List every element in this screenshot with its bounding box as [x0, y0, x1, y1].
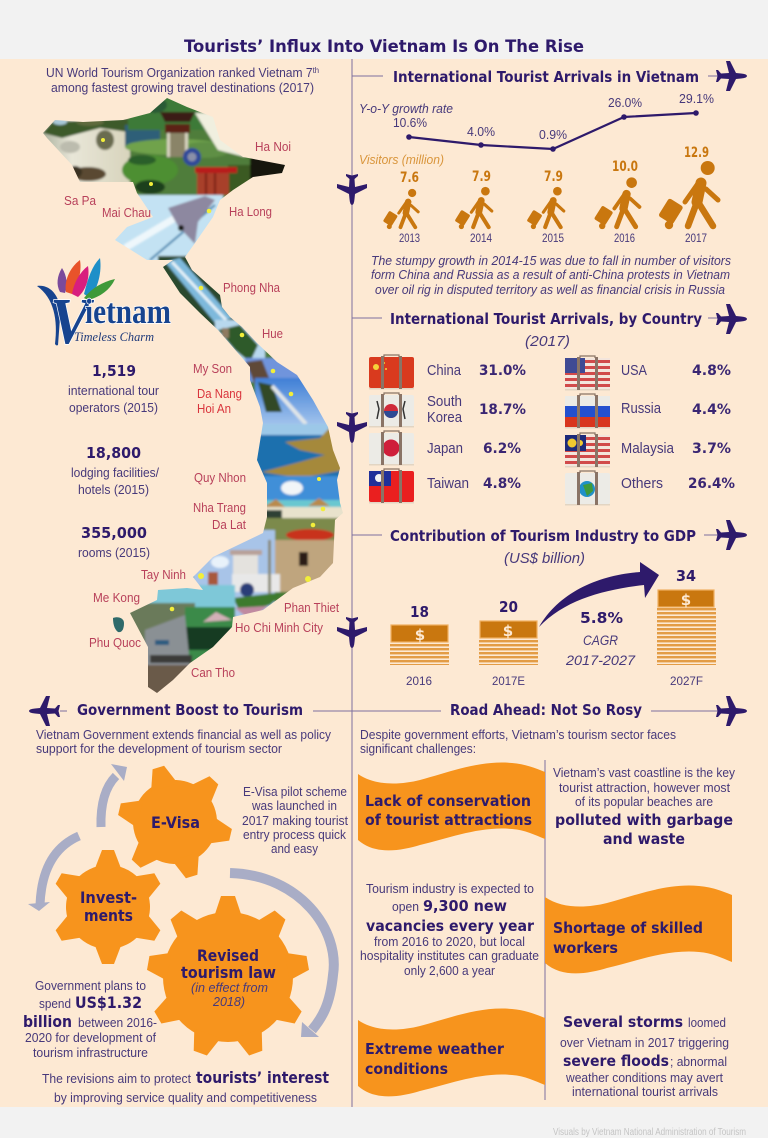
- pictogram chart: visitors in million: Visitors (million): [359, 153, 444, 167]
- road ahead intro: Despite government efforts, Vietnam’s tourism sector faces: [360, 728, 676, 742]
- map place labels: Ho Chi Minh City: [235, 621, 324, 635]
- row: South Korea: South: [427, 394, 462, 410]
- row: Japan: [369, 431, 521, 466]
- pictogram chart: visitors in million: 2015: [542, 233, 564, 245]
- road ahead intro: [360, 728, 676, 756]
- text: polluted beaches: tourist attraction, however most: [559, 781, 731, 795]
- money stack: 2017E: [479, 598, 538, 688]
- map place labels: Me Kong: [93, 591, 140, 605]
- text: polluted beaches: polluted with garbage: [555, 811, 733, 829]
- banner: shortage of skilled workers: workers: [553, 939, 618, 957]
- money stack: 2016: 18: [410, 603, 429, 621]
- investment description: spend: [39, 997, 71, 1011]
- icon: divider plane 3: [337, 617, 367, 648]
- heading: arrivals by country: (2017): [525, 334, 570, 350]
- pictogram chart: visitors in million: 12.9: [684, 145, 709, 161]
- row: Malaysia: Malaysia: [621, 441, 675, 457]
- ranking statement: among fastest growing travel destinations (2017): [51, 81, 314, 95]
- stat: tour operators: 1,519: [92, 362, 136, 380]
- banner: shortage of skilled workers: Shortage of skilled: [553, 919, 703, 937]
- gear: Investments: ments: [84, 906, 133, 925]
- bottom band: [0, 1107, 768, 1138]
- map place labels: Da Nang: [197, 387, 242, 401]
- line chart: year-on-year growth rate: 4.0%: [467, 125, 495, 139]
- text: vacancies: [360, 882, 539, 978]
- E-Visa description: entry process quick: [243, 828, 347, 842]
- investment description: Government plans to: [35, 979, 146, 993]
- row: China: China: [427, 363, 462, 379]
- top band: [0, 0, 768, 59]
- stat: lodging facilities: lodging facilities/: [71, 466, 160, 480]
- pictogram chart: visitors in million: 2013: [399, 233, 420, 245]
- text: storms and floods: Several storms: [563, 1013, 683, 1031]
- stat: rooms: [78, 524, 150, 560]
- text: storms and floods: loomed: [688, 1016, 726, 1030]
- heading: International Tourist Arrivals in Vietnam: International Tourist Arrivals in Vietnam: [393, 68, 699, 86]
- logo: Vietnam Timeless Charm: V: [50, 285, 95, 358]
- money stack: 2016: $: [415, 626, 425, 644]
- text: polluted beaches: [553, 766, 736, 848]
- island: Phu Quoc: [113, 617, 124, 632]
- pictogram chart: visitors in million: 2014: [470, 233, 493, 245]
- pictogram chart: visitors in million: 7.6: [400, 170, 419, 186]
- stat: tour operators: operators (2015): [69, 401, 158, 415]
- E-Visa description: and easy: [271, 842, 319, 856]
- heading: arrivals by country: [352, 304, 747, 350]
- logo: Vietnam Timeless Charm: ietnam: [85, 292, 171, 331]
- row: Russia: 4.4%: [692, 402, 731, 418]
- stat: lodging facilities: 18,800: [86, 444, 141, 462]
- heading: Road Ahead: [352, 696, 747, 726]
- money stack: 2016: 2016: [406, 676, 432, 688]
- stat: tour operators: international tour: [68, 384, 159, 398]
- row: Taiwan: 4.8%: [483, 476, 521, 492]
- line chart: year-on-year growth rate: Y-o-Y growth rate: [359, 102, 453, 116]
- row: China: [369, 355, 526, 390]
- logo: Vietnam Timeless Charm: Timeless Charm: [74, 330, 154, 344]
- text: storms and floods: severe floods: [563, 1052, 669, 1070]
- pictogram chart: visitors in million: 7.9: [472, 169, 491, 185]
- row: Others: Others: [621, 476, 663, 492]
- banner: shortage of skilled workers: [545, 886, 732, 973]
- text: vacancies: vacancies every year: [366, 917, 535, 935]
- banner: lack of conservation: Lack of conservation: [365, 792, 531, 810]
- banner: extreme weather: [358, 1009, 545, 1096]
- map place labels: Phu Quoc: [89, 636, 141, 650]
- investment description: tourism infrastructure: [33, 1046, 148, 1060]
- map place labels: Phan Thiet: [284, 601, 339, 615]
- row: Japan: 6.2%: [483, 441, 521, 457]
- heading: contribution to GDP: [352, 520, 747, 567]
- gear: E-Visa: E-Visa: [151, 813, 200, 832]
- money stack: 2017E: 20: [499, 598, 518, 616]
- gear: Revised tourism law: Revised: [197, 946, 259, 965]
- investment description: 2020 for development of: [25, 1031, 156, 1045]
- heading: arrivals by country: International Tourist Arrivals, by Country: [390, 310, 702, 328]
- text: vacancies: only 2,600 a year: [404, 964, 495, 978]
- text: storms and floods: over Vietnam in 2017 triggering: [560, 1036, 729, 1050]
- stat: rooms: 355,000: [81, 524, 147, 542]
- text: storms and floods: ; abnormal: [670, 1055, 727, 1069]
- text: polluted beaches: of its popular beaches are: [575, 795, 713, 809]
- heading: contribution to GDP: Contribution of Tourism Industry to GDP: [390, 527, 696, 545]
- explanatory note: The stumpy growth in 2014-15 was due to fall in number of visitors: [371, 254, 731, 268]
- row: Taiwan: Taiwan: [427, 476, 469, 492]
- banner: extreme weather: Extreme weather: [365, 1040, 505, 1058]
- line chart: year-on-year growth rate: 0.9%: [539, 128, 567, 142]
- E-Visa description: was launched in: [251, 799, 337, 813]
- E-Visa description: 2017 making tourist: [242, 814, 349, 828]
- line chart: year-on-year growth rate: [359, 92, 714, 152]
- stat: tour operators: [68, 362, 159, 415]
- map place labels: Phong Nha: [223, 281, 280, 295]
- stat: lodging facilities: hotels (2015): [78, 483, 149, 497]
- row: Japan: Japan: [427, 441, 463, 457]
- pictogram chart: visitors in million: 10.0: [612, 159, 638, 175]
- gear: Investments: Invest-: [80, 888, 137, 907]
- money stack: 2027F: 34: [676, 567, 696, 585]
- CAGR callout: CAGR: [583, 633, 618, 648]
- investment description: [23, 979, 157, 1060]
- pictogram chart: visitors in million: [359, 145, 718, 245]
- heading: Government Boost to Tourism: Government Boost to Tourism: [77, 701, 303, 719]
- text: vacancies: Tourism industry is expected to: [366, 882, 534, 896]
- map place labels: Quy Nhon: [194, 471, 246, 485]
- heading: contribution to GDP: (US$ billion): [504, 551, 585, 567]
- line chart: year-on-year growth rate: 29.1%: [679, 92, 714, 106]
- explanatory note: over oil rig in disputed territory as well as financial crisis in Russia: [375, 283, 725, 297]
- government intro text: support for the development of tourism sector: [36, 742, 282, 756]
- line chart: year-on-year growth rate: 10.6%: [393, 116, 427, 130]
- row: Malaysia: 3.7%: [692, 441, 731, 457]
- government intro text: [36, 728, 332, 756]
- investment description: between 2016-: [78, 1016, 157, 1030]
- map place labels: [64, 140, 339, 680]
- map place labels: Can Tho: [191, 666, 235, 680]
- map place labels: Hue: [262, 327, 283, 341]
- road ahead intro: significant challenges:: [360, 742, 476, 756]
- map place labels: My Son: [193, 362, 232, 376]
- text: vacancies: 9,300 new: [423, 897, 507, 915]
- investment description: US$1.32: [75, 993, 142, 1012]
- investment description: billion: [23, 1012, 72, 1031]
- money stack: 2017E: $: [503, 622, 513, 640]
- banner: lack of conservation: [358, 763, 545, 850]
- money stack: 2016: [390, 603, 449, 688]
- text: storms and floods: international tourist arrivals: [572, 1085, 718, 1099]
- text: vacancies: open: [392, 900, 419, 914]
- explanatory note: [371, 254, 731, 297]
- map place labels: Mai Chau: [102, 206, 151, 220]
- text: vacancies: hospitality institutes can graduate: [360, 949, 539, 963]
- row: South Korea: [369, 393, 526, 428]
- revisions statement: The revisions aim to protect: [42, 1072, 191, 1086]
- text: storms and floods: [560, 1013, 729, 1099]
- heading: Government Boost to Tourism: [29, 696, 352, 726]
- icon: divider plane 2: [337, 412, 367, 443]
- pictogram chart: visitors in million: 7.9: [544, 169, 563, 185]
- E-Visa description: E-Visa pilot scheme: [243, 785, 347, 799]
- stat: lodging facilities: [71, 444, 160, 497]
- pictogram chart: visitors in million: 2016: [614, 233, 635, 245]
- text: vacancies: from 2016 to 2020, but local: [374, 935, 525, 949]
- ranking statement: [46, 66, 319, 95]
- gear: Revised tourism law: tourism law: [181, 963, 276, 982]
- map place labels: Da Lat: [212, 518, 246, 532]
- text: polluted beaches: Vietnam’s vast coastline is the key: [553, 766, 736, 780]
- government intro text: Vietnam Government extends financial as well as policy: [36, 728, 332, 742]
- heading: International Tourist Arrivals in Vietnam: [352, 61, 747, 91]
- ranking statement: UN World Tourism Organization ranked Vietnam 7: [46, 66, 323, 80]
- map place labels: Nha Trang: [193, 501, 246, 515]
- line chart: year-on-year growth rate: 26.0%: [608, 96, 642, 110]
- gear: Investments: [30, 830, 186, 984]
- CAGR callout: 2017-2027: [565, 653, 636, 668]
- map place labels: Ha Long: [229, 205, 272, 219]
- row: Taiwan: [369, 469, 521, 504]
- text: storms and floods: weather conditions may avert: [565, 1071, 723, 1085]
- map place labels: Hoi An: [197, 402, 231, 416]
- banner: extreme weather: conditions: [365, 1060, 448, 1078]
- revisions statement: [42, 1068, 329, 1105]
- row: South Korea: Korea: [427, 410, 463, 426]
- gear: Revised tourism law: 2018): [212, 995, 245, 1009]
- E-Visa description: [242, 785, 349, 856]
- row: USA: USA: [621, 363, 647, 379]
- row: Others: [565, 471, 735, 506]
- row: USA: 4.8%: [692, 363, 731, 379]
- money stack: 2027F: 2027F: [670, 676, 703, 688]
- icon: divider plane 1: [337, 174, 367, 205]
- cycle arrows: [28, 764, 334, 1037]
- stat: rooms: rooms (2015): [78, 546, 150, 560]
- row: South Korea: 18.7%: [479, 402, 526, 418]
- row: Others: 26.4%: [688, 476, 735, 492]
- map location dots: [101, 138, 325, 611]
- text: polluted beaches: and waste: [603, 830, 685, 848]
- logo: Vietnam Timeless Charm: [37, 258, 171, 358]
- row: Malaysia: [565, 433, 731, 468]
- heading: Road Ahead: Road Ahead: Not So Rosy: [450, 701, 642, 719]
- growth arrow: [539, 562, 659, 627]
- row: Russia: Russia: [621, 401, 662, 417]
- money stack: 2027F: $: [681, 591, 691, 609]
- map place labels: Sa Pa: [64, 194, 96, 208]
- map place labels: Tay Ninh: [141, 568, 186, 582]
- CAGR callout: 5.8%: [580, 609, 623, 627]
- map place labels: Ha Noi: [255, 140, 291, 154]
- revisions statement: tourists’ interest: [196, 1068, 329, 1087]
- money stack: 2017E: 2017E: [492, 676, 525, 688]
- money stack: 2027F: [657, 567, 716, 688]
- explanatory note: form China and Russia as a result of anti-China protests in Vietnam: [371, 268, 730, 282]
- title: Tourists’ Influx Into Vietnam Is On The Rise: [184, 37, 584, 57]
- row: USA: [565, 356, 731, 390]
- banner: lack of conservation: of tourist attractions: [365, 811, 532, 829]
- pictogram chart: visitors in million: 2017: [685, 233, 707, 245]
- gear: Revised tourism law: [146, 896, 310, 1058]
- ranking statement: th: [313, 66, 319, 75]
- map of Vietnam: [40, 90, 350, 700]
- gear: Revised tourism law: (in effect from: [191, 981, 268, 995]
- gear: E-Visa: [107, 754, 243, 890]
- CAGR callout: [565, 609, 636, 668]
- revisions statement: by improving service quality and competitiveness: [54, 1091, 317, 1105]
- row: Russia: [565, 394, 731, 428]
- row: China: 31.0%: [479, 363, 526, 379]
